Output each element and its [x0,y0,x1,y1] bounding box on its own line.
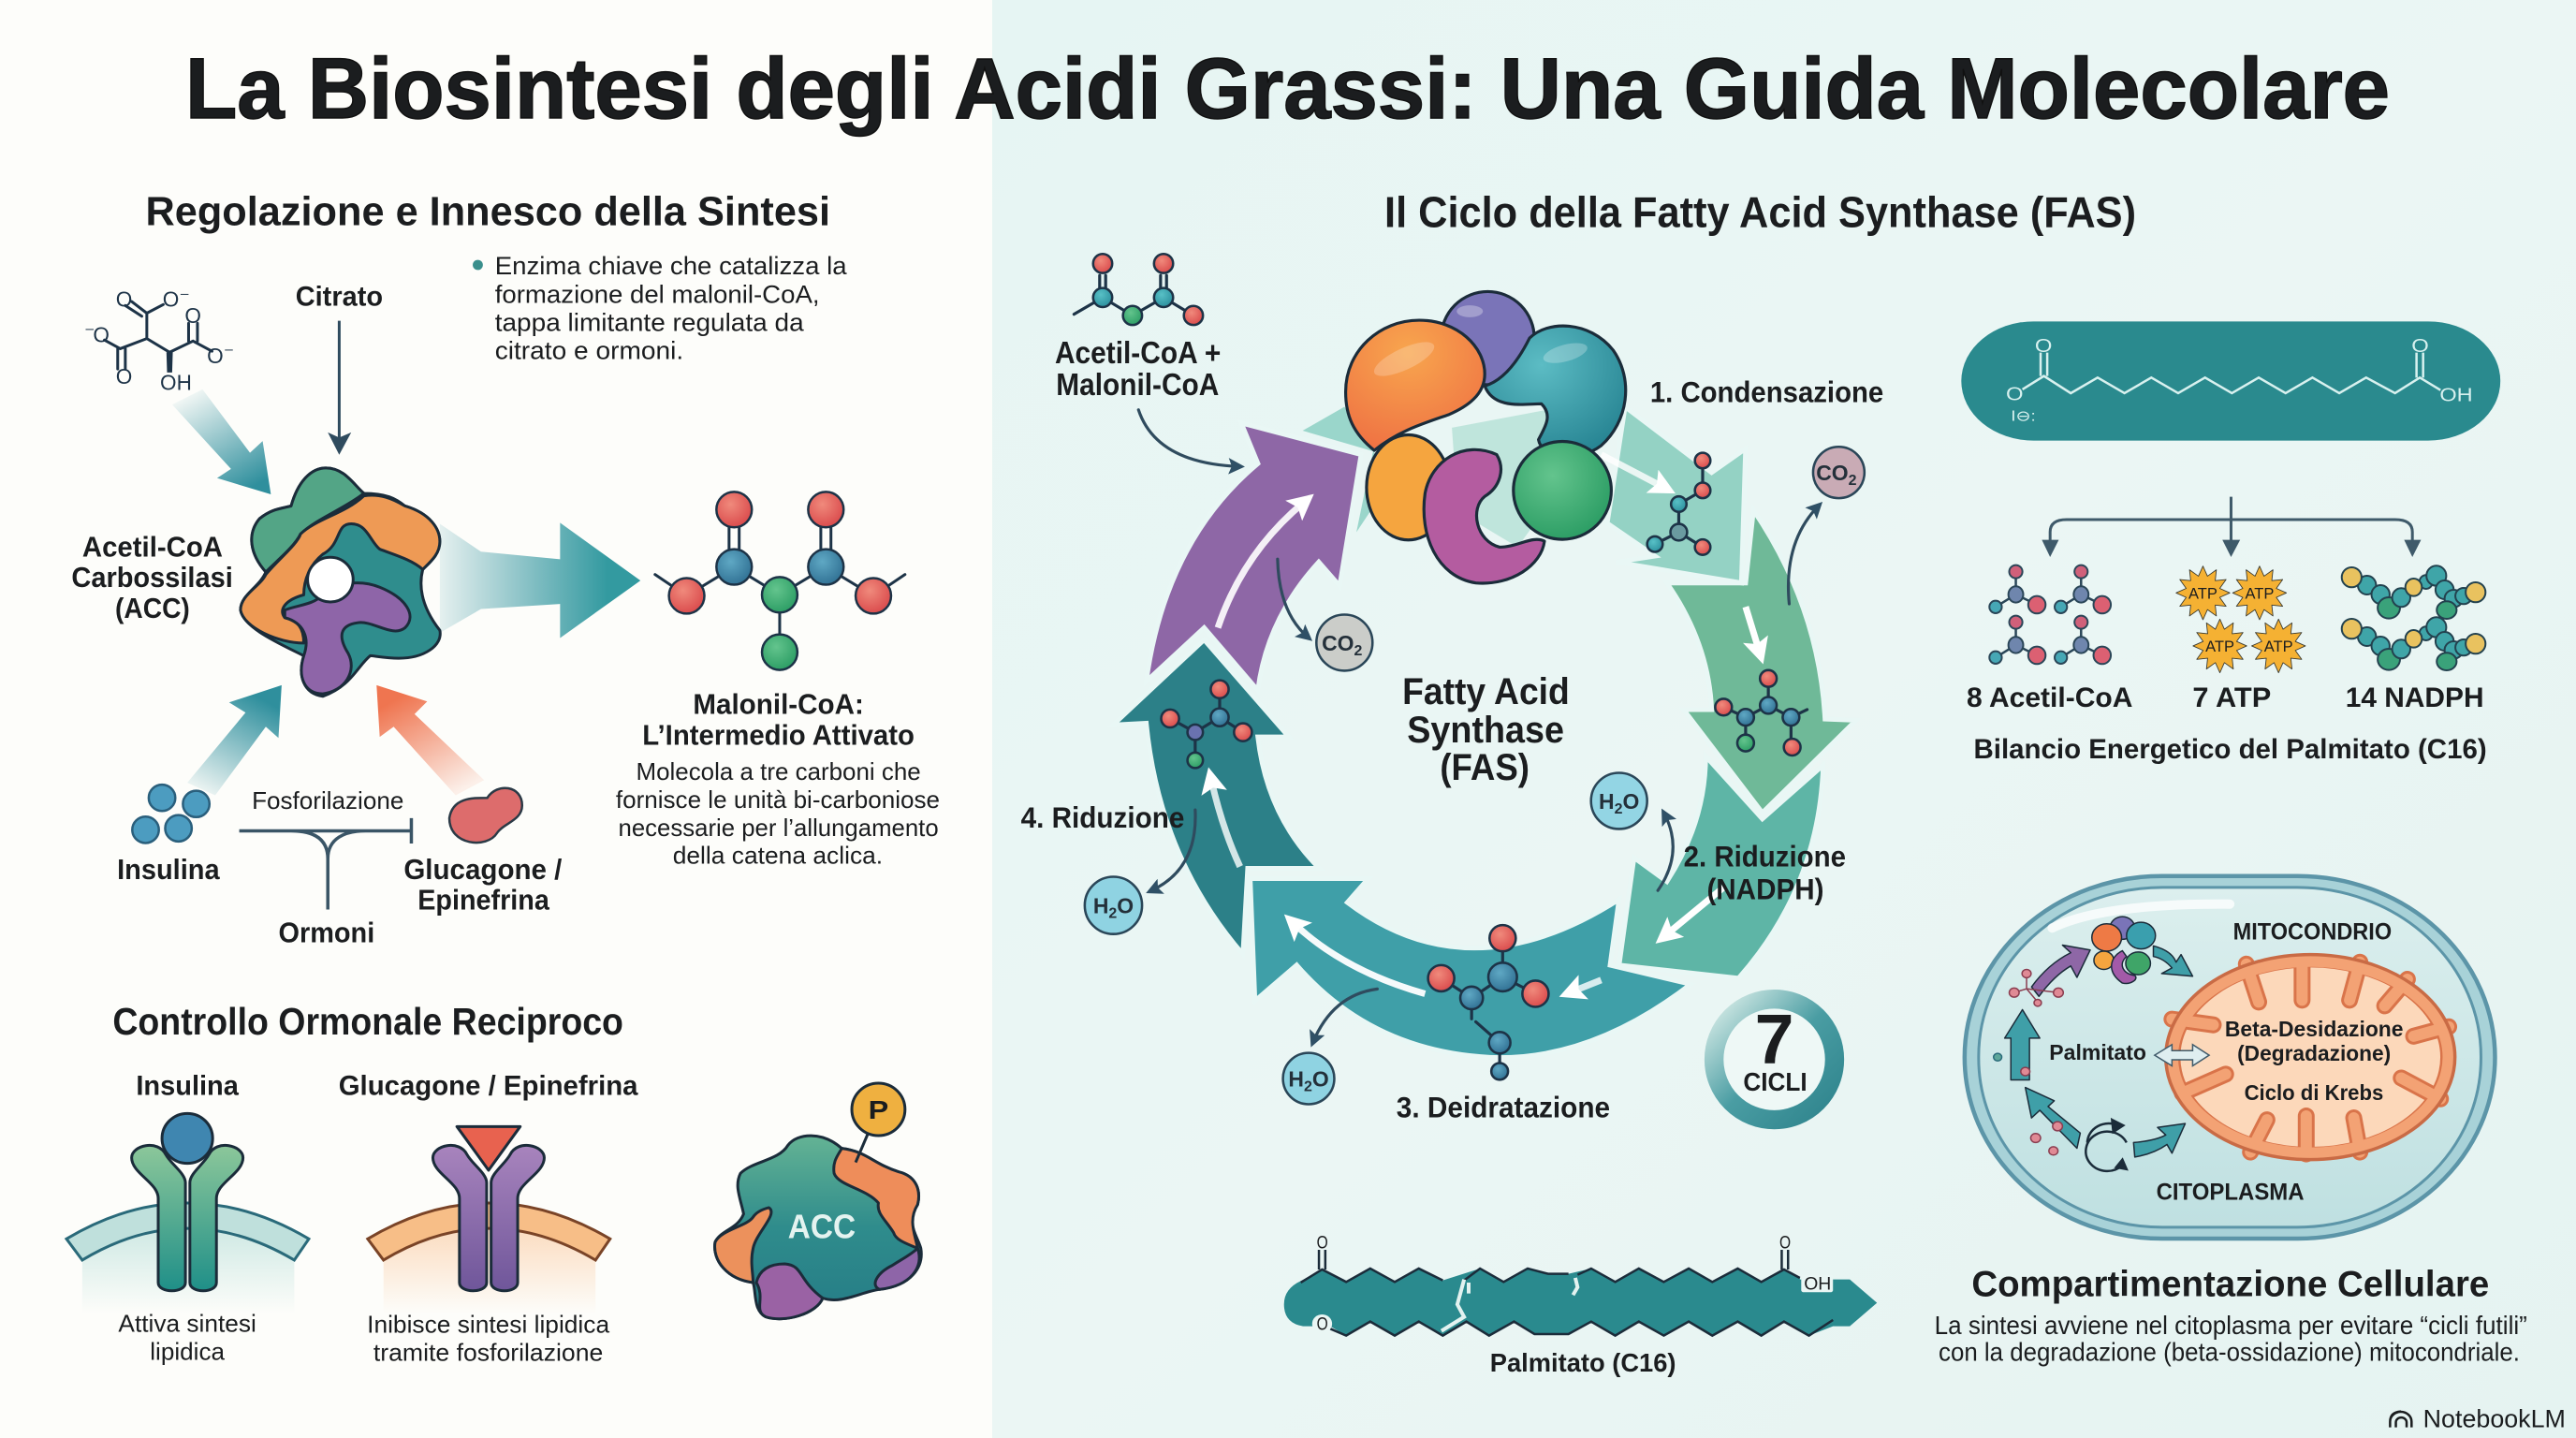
byproduct: H2O right [1591,773,1673,890]
heading: compartimentazione: Compartimentazione Cellulare [1971,1263,2489,1304]
molecule: step 3 [1428,925,1548,1079]
bullet text: enzima chiave [473,252,847,364]
text block: malonil-CoA intermediate: della catena aclica. [673,843,883,870]
text block: malonil-CoA intermediate: necessarie per l’allungamento [619,814,939,842]
label: glucagone / epinefrina: Epinefrina [417,885,550,917]
icon: palmitate bar: OH [1804,1273,1831,1294]
center label: fatty acid synthase: (FAS) [1440,747,1530,788]
label: acetil-CoA + malonil-CoA: Acetil-CoA + [1055,336,1221,371]
byproduct: CO2 left: 2 [1354,643,1363,659]
arrow tree: requirements [2042,497,2421,557]
badge: 7 cicli: 7 [1755,1000,1793,1078]
arrow: step 5 dark teal [1113,639,1320,954]
label: mitocondrio: MITOCONDRIO [2233,917,2392,945]
byproduct: H2O bottom: H [1288,1066,1304,1091]
title: La Biosintesi degli Acidi Grassi: Una Guida Molecolare [185,41,2390,137]
molecule: citrate structure: O [163,288,179,312]
text block: malonil-CoA intermediate: Malonil-CoA: [693,689,864,721]
mini arrows: cycle [2005,946,2192,1157]
inner white arrows [1211,455,1760,993]
text block: compartimentazione [1935,1312,2527,1367]
molecule: step 2 [1715,670,1808,756]
byproduct: CO2 left [1278,559,1372,670]
byproduct: H2O left: H [1093,893,1108,917]
double arrow: palmitato mitochondrion [2155,1045,2209,1065]
segment: pale accent behind enzyme [1303,407,1374,532]
label: 14 NADPH: 14 NADPH [2346,682,2484,713]
icon: ACC enzyme [241,468,440,697]
icon: ATP starbursts: ATP [2188,585,2217,603]
center label: fatty acid synthase: Synthase [1407,710,1564,751]
icon: ATP starbursts [2176,566,2305,673]
byproduct: CO2 left: CO [1322,631,1354,655]
label: step 2: (NADPH) [1706,873,1823,906]
panel: compartimentazione cellulare [1935,876,2566,1432]
molecule: citrate structure: O [184,304,201,328]
diagram: mitochondrion [2166,955,2455,1160]
molecule: step 1 [1647,453,1710,555]
byproduct: CO2 right [1789,447,1865,604]
icon: insulin receptor [66,1113,309,1313]
byproduct: H2O bottom: O [1312,1066,1329,1091]
icon: acetil-CoA molecules [1989,565,2111,664]
text block: malonil-CoA intermediate [616,689,940,870]
bullet text: enzima chiave: tappa limitante regulata da [495,309,805,337]
label: step 3: 3. Deidratazione [1397,1091,1610,1124]
center label: fatty acid synthase [1402,671,1570,788]
molecule: citrate structure: O [207,345,224,368]
panel background: left [0,0,992,1438]
icon: fatty acid synthase enzyme [1346,291,1626,583]
byproduct: H2O right: O [1622,789,1639,814]
text block: malonil-CoA intermediate: Molecola a tre carboni che [636,758,921,785]
bullet text: enzima chiave: Enzima chiave che catalizza la [495,252,847,280]
arrow: insulina to ACC [187,685,282,795]
molecule: citrate structure: O [116,288,132,312]
heading: ciclo FAS: Il Ciclo della Fatty Acid Synthase (FAS) [1384,188,2136,237]
panel: bilancio energetico [1961,321,2500,765]
label: ormoni: Ormoni [278,917,374,949]
icon: phosphorylated ACC: P [869,1095,888,1124]
panel: controllo ormonale: Glucagone / Epinefrina [339,1070,638,1101]
label: 7 ATP: 7 ATP [2192,682,2271,713]
arrow: step 2 green [1667,510,1856,813]
panel: ciclo FAS [1021,188,2136,1124]
panel background: right [992,0,2576,1438]
panel: palmitato chain [1284,1232,1877,1377]
icon: palmitate structure pill: O [2006,383,2023,404]
icon: glucagone [449,788,522,843]
text block: malonil-CoA intermediate: fornisce le unità bi-carboniose [616,786,940,814]
badge: 7 cicli: CICLI [1743,1067,1808,1096]
icon: insulina [132,785,210,843]
label: palmitato: Palmitato [2049,1042,2146,1065]
label: step 1: 1. Condensazione [1650,374,1883,408]
icon: palmitate structure pill: OH [2439,385,2473,406]
label: acetil-CoA carbossilasi: Carbossilasi [71,563,233,594]
label: acetil-CoA carbossilasi: (ACC) [115,593,190,624]
logo: NotebookLM: NotebookLM [2423,1405,2566,1432]
byproduct: CO2 right: 2 [1849,473,1857,489]
molecule: citrate structure: − [85,323,95,337]
arrow: citrato to ACC [328,321,351,455]
arrow: step 4 teal [1251,878,1690,1058]
molecule: citrate structure: O [93,324,110,347]
panel: controllo ormonale: Insulina [136,1070,239,1101]
label: 8 acetil-CoA: 8 Acetil-CoA [1967,682,2132,713]
arrow: substrate entry [1138,410,1240,466]
icon: phosphorylated ACC [715,1083,921,1319]
badge: 7 cicli [1714,999,1835,1120]
molecule: step 4 [1161,681,1251,768]
label: citoplasma: CITOPLASMA [2157,1178,2305,1205]
molecule: citrate structure: − [224,344,234,358]
diagram: cell [1965,876,2495,1239]
icon: palmitate structure pill: O [2035,335,2052,357]
icon: palmitate structure pill: O [2411,335,2429,357]
label: acetil-CoA carbossilasi: Acetil-CoA [82,532,223,564]
caption: inibisce sintesi: tramite fosforilazione [373,1339,603,1366]
arrow: step 6 purple [1147,423,1361,690]
byproduct: H2O left: 2 [1108,905,1117,921]
label: acetil-CoA + malonil-CoA: Malonil-CoA [1056,368,1219,403]
label: citrato: Citrato [296,281,383,312]
icon: ATP starbursts: ATP [2205,638,2234,655]
molecule: citrate structure: − [180,287,189,301]
caption: inibisce sintesi [367,1311,610,1366]
label: step 2 [1684,840,1846,906]
icon: ATP starbursts: ATP [2245,585,2274,603]
byproduct: H2O bottom [1283,989,1377,1104]
icon: palmitate bar: O [1317,1232,1328,1253]
byproduct: H2O bottom: 2 [1304,1078,1312,1094]
molecule: acetil + malonil [1074,254,1203,325]
label: acetil-CoA carbossilasi [71,532,233,624]
bullet text: enzima chiave: citrato e ormoni. [495,336,683,364]
mini icon: enzyme [2092,917,2156,983]
connector: ormoni inhibition [240,818,411,909]
caption: inibisce sintesi: Inibisce sintesi lipidica [367,1311,610,1338]
byproduct: H2O right: H [1599,789,1615,814]
arrow: step 1 pale teal [1607,407,1746,583]
icon: ATP starbursts: ATP [2264,638,2293,655]
molecule: citrate structure [85,287,234,395]
arrow: substrate to ACC [172,389,271,494]
icon: NADPH chains [2342,565,2485,670]
icon: palmitate bar: O [1317,1314,1328,1334]
panel: controllo ormonale: Attiva sintesi [118,1310,256,1337]
arrow: glucagone to ACC [376,685,484,795]
byproduct: H2O left [1085,810,1195,934]
icon: palmitate structure pill: I⊖: [2011,408,2036,424]
label: acetil-CoA + malonil-CoA [1055,336,1221,403]
panel: controllo ormonale: Controllo Ormonale Reciproco [112,1000,623,1043]
molecule: citrate structure: O [116,365,132,389]
diagram: mitochondrion: Beta-Desidazione [2225,1019,2403,1042]
icon: recycling circle [2086,1120,2127,1171]
label: step 4: 4. Riduzione [1021,800,1184,834]
label: palmitato C16: Palmitato (C16) [1490,1348,1676,1377]
icon: glucagon receptor [368,1126,610,1313]
mini atoms [1994,969,2063,1155]
center label: fatty acid synthase: Fatty Acid [1402,671,1570,712]
molecule: malonil-CoA [655,492,905,670]
label: fosforilazione: Fosforilazione [252,787,403,814]
bullet text: enzima chiave: formazione del malonil-CoA, [495,281,820,309]
label: glucagone / epinefrina [403,854,563,917]
icon: phosphorylated ACC: ACC [788,1209,856,1246]
icon: palmitate structure pill [1961,321,2500,441]
molecule: citrate structure: OH [160,372,192,395]
arrow: ACC to malonil-CoA [440,522,640,638]
byproduct: H2O right: 2 [1615,801,1623,817]
byproduct: H2O left: O [1117,893,1134,917]
diagram: mitochondrion: Ciclo di Krebs [2245,1082,2383,1106]
diagram: mitochondrion: (Degradazione) [2237,1043,2391,1066]
arrow: step 3 teal green [1619,756,1823,978]
text block: malonil-CoA intermediate: L’Intermedio Attivato [642,720,915,751]
label: insulina: Insulina [117,854,220,886]
label: step 2: 2. Riduzione [1684,840,1846,873]
caption: attiva sintesi: lipidica [150,1338,226,1365]
label: glucagone / epinefrina: Glucagone / [403,854,563,886]
icon: palmitate bar [1284,1232,1877,1336]
heading: regolazione: Regolazione e Innesco della Sintesi [146,190,830,234]
icon: palmitate bar: O [1779,1232,1791,1253]
byproduct: CO2 right: CO [1816,461,1849,485]
panel: controllo ormonale [66,1000,921,1366]
panel: regolazione e innesco [71,190,940,949]
caption: attiva sintesi [118,1310,256,1365]
